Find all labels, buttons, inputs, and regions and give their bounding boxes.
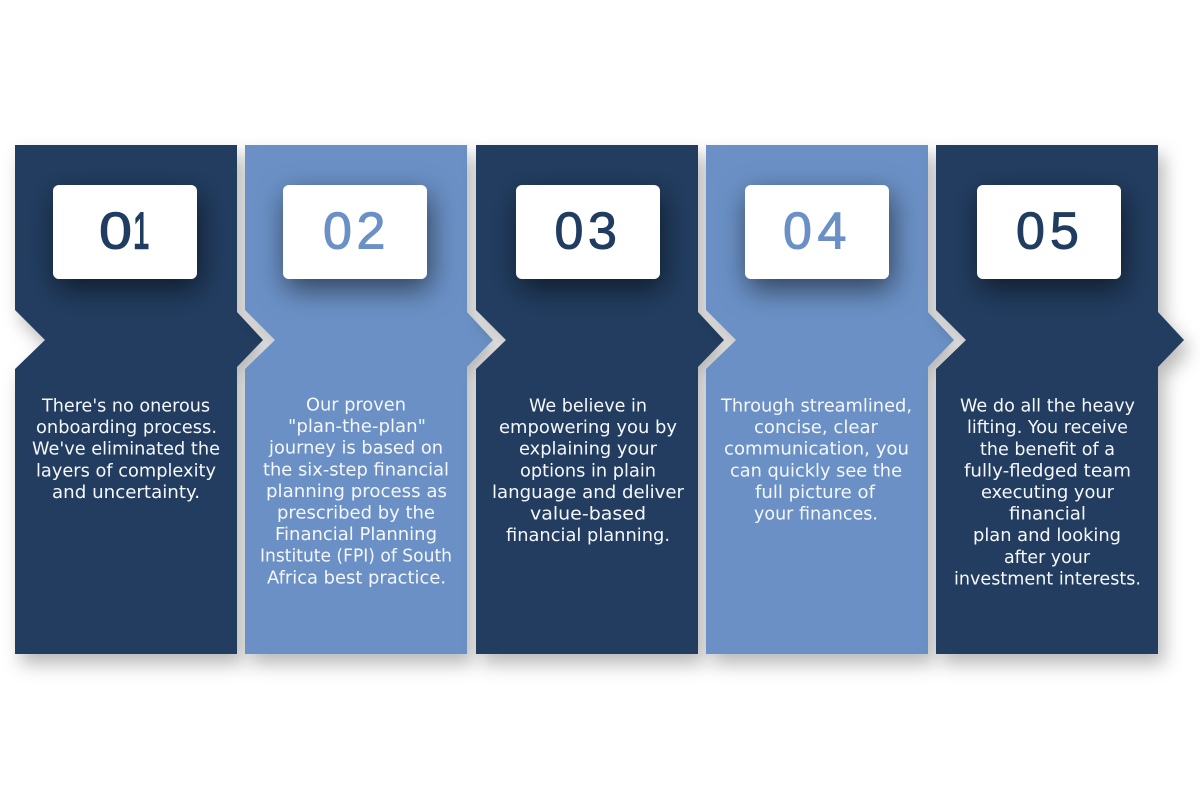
text: panel 04: Through streamlined, xyxy=(720,396,912,416)
number card 03: 0 xyxy=(554,202,583,260)
text: panel 03 xyxy=(492,396,685,546)
text: panel 05: plan and looking xyxy=(973,526,1121,546)
number card 01: 1 xyxy=(133,202,150,260)
text: panel 01: layers of complexity xyxy=(36,461,216,481)
number card 01 xyxy=(53,185,197,279)
text: panel 01: We've eliminated the xyxy=(32,440,220,460)
text: panel 01 xyxy=(32,396,220,503)
text: panel 05: fully-fledged team xyxy=(964,461,1131,481)
text: panel 02: the six-step financial xyxy=(263,460,449,480)
text: panel 03: empowering you by xyxy=(499,418,677,438)
number card 02: 0 xyxy=(323,202,352,260)
text: panel 03: options in plain xyxy=(520,461,656,481)
number card 02 xyxy=(283,185,427,279)
text: panel 05: after your xyxy=(1004,548,1091,568)
text: panel 03: We believe in xyxy=(529,396,647,416)
panel 04 xyxy=(706,145,954,654)
text: panel 02: journey is based on xyxy=(268,439,443,459)
text: panel 04: communication, you xyxy=(724,440,909,460)
text: panel 01: There's no onerous xyxy=(41,396,210,416)
text: panel 03: explaining your xyxy=(519,440,658,460)
text: panel 02: Financial Planning xyxy=(275,525,437,545)
text: panel 05 xyxy=(954,397,1141,589)
text: panel 02: prescribed by the xyxy=(277,504,435,524)
number card 01: 0 xyxy=(99,202,132,260)
text: panel 03: language and deliver xyxy=(492,483,685,503)
panel 03 xyxy=(476,145,724,654)
text: panel 04: can quickly see the xyxy=(730,461,902,481)
text: panel 02: "plan-the-plan" xyxy=(288,417,426,437)
text: panel 02 xyxy=(260,396,452,588)
number card 05: 5 xyxy=(1050,202,1079,260)
text: panel 04 xyxy=(720,396,912,524)
number card 03 xyxy=(516,185,660,279)
text: panel 02: Our proven xyxy=(306,396,406,416)
text: panel 03: financial planning. xyxy=(506,526,670,546)
text: panel 04: concise, clear xyxy=(754,418,879,438)
text: panel 02: Institute (FPI) of South xyxy=(260,547,452,567)
panel 01 xyxy=(15,145,263,654)
text: panel 03: value-based xyxy=(530,504,646,524)
text: panel 05: the benefit of a xyxy=(980,440,1115,460)
text: panel 04: your finances. xyxy=(754,504,878,524)
number card 04: 4 xyxy=(818,202,846,260)
number card 02: 2 xyxy=(356,202,385,260)
text: panel 05: executing your xyxy=(981,483,1115,503)
text: panel 01: and uncertainty. xyxy=(52,483,200,503)
text: panel 05: We do all the heavy xyxy=(960,397,1135,417)
number card 04: 0 xyxy=(783,202,812,260)
text: panel 05: financial xyxy=(1009,505,1086,525)
text: panel 02: planning process as xyxy=(266,482,447,502)
panel 02 xyxy=(245,145,493,654)
text: panel 02: Africa best practice. xyxy=(267,568,446,588)
text: panel 05: investment interests. xyxy=(954,569,1141,589)
text: panel 05: lifting. You receive xyxy=(967,418,1128,438)
panel 05 xyxy=(936,145,1184,654)
text: panel 01: onboarding process. xyxy=(36,418,217,438)
number card 04 xyxy=(745,185,889,279)
number card 03: 3 xyxy=(588,202,617,260)
text: panel 04: full picture of xyxy=(755,483,876,503)
number card 05: 0 xyxy=(1016,202,1045,260)
number card 05 xyxy=(977,185,1121,279)
